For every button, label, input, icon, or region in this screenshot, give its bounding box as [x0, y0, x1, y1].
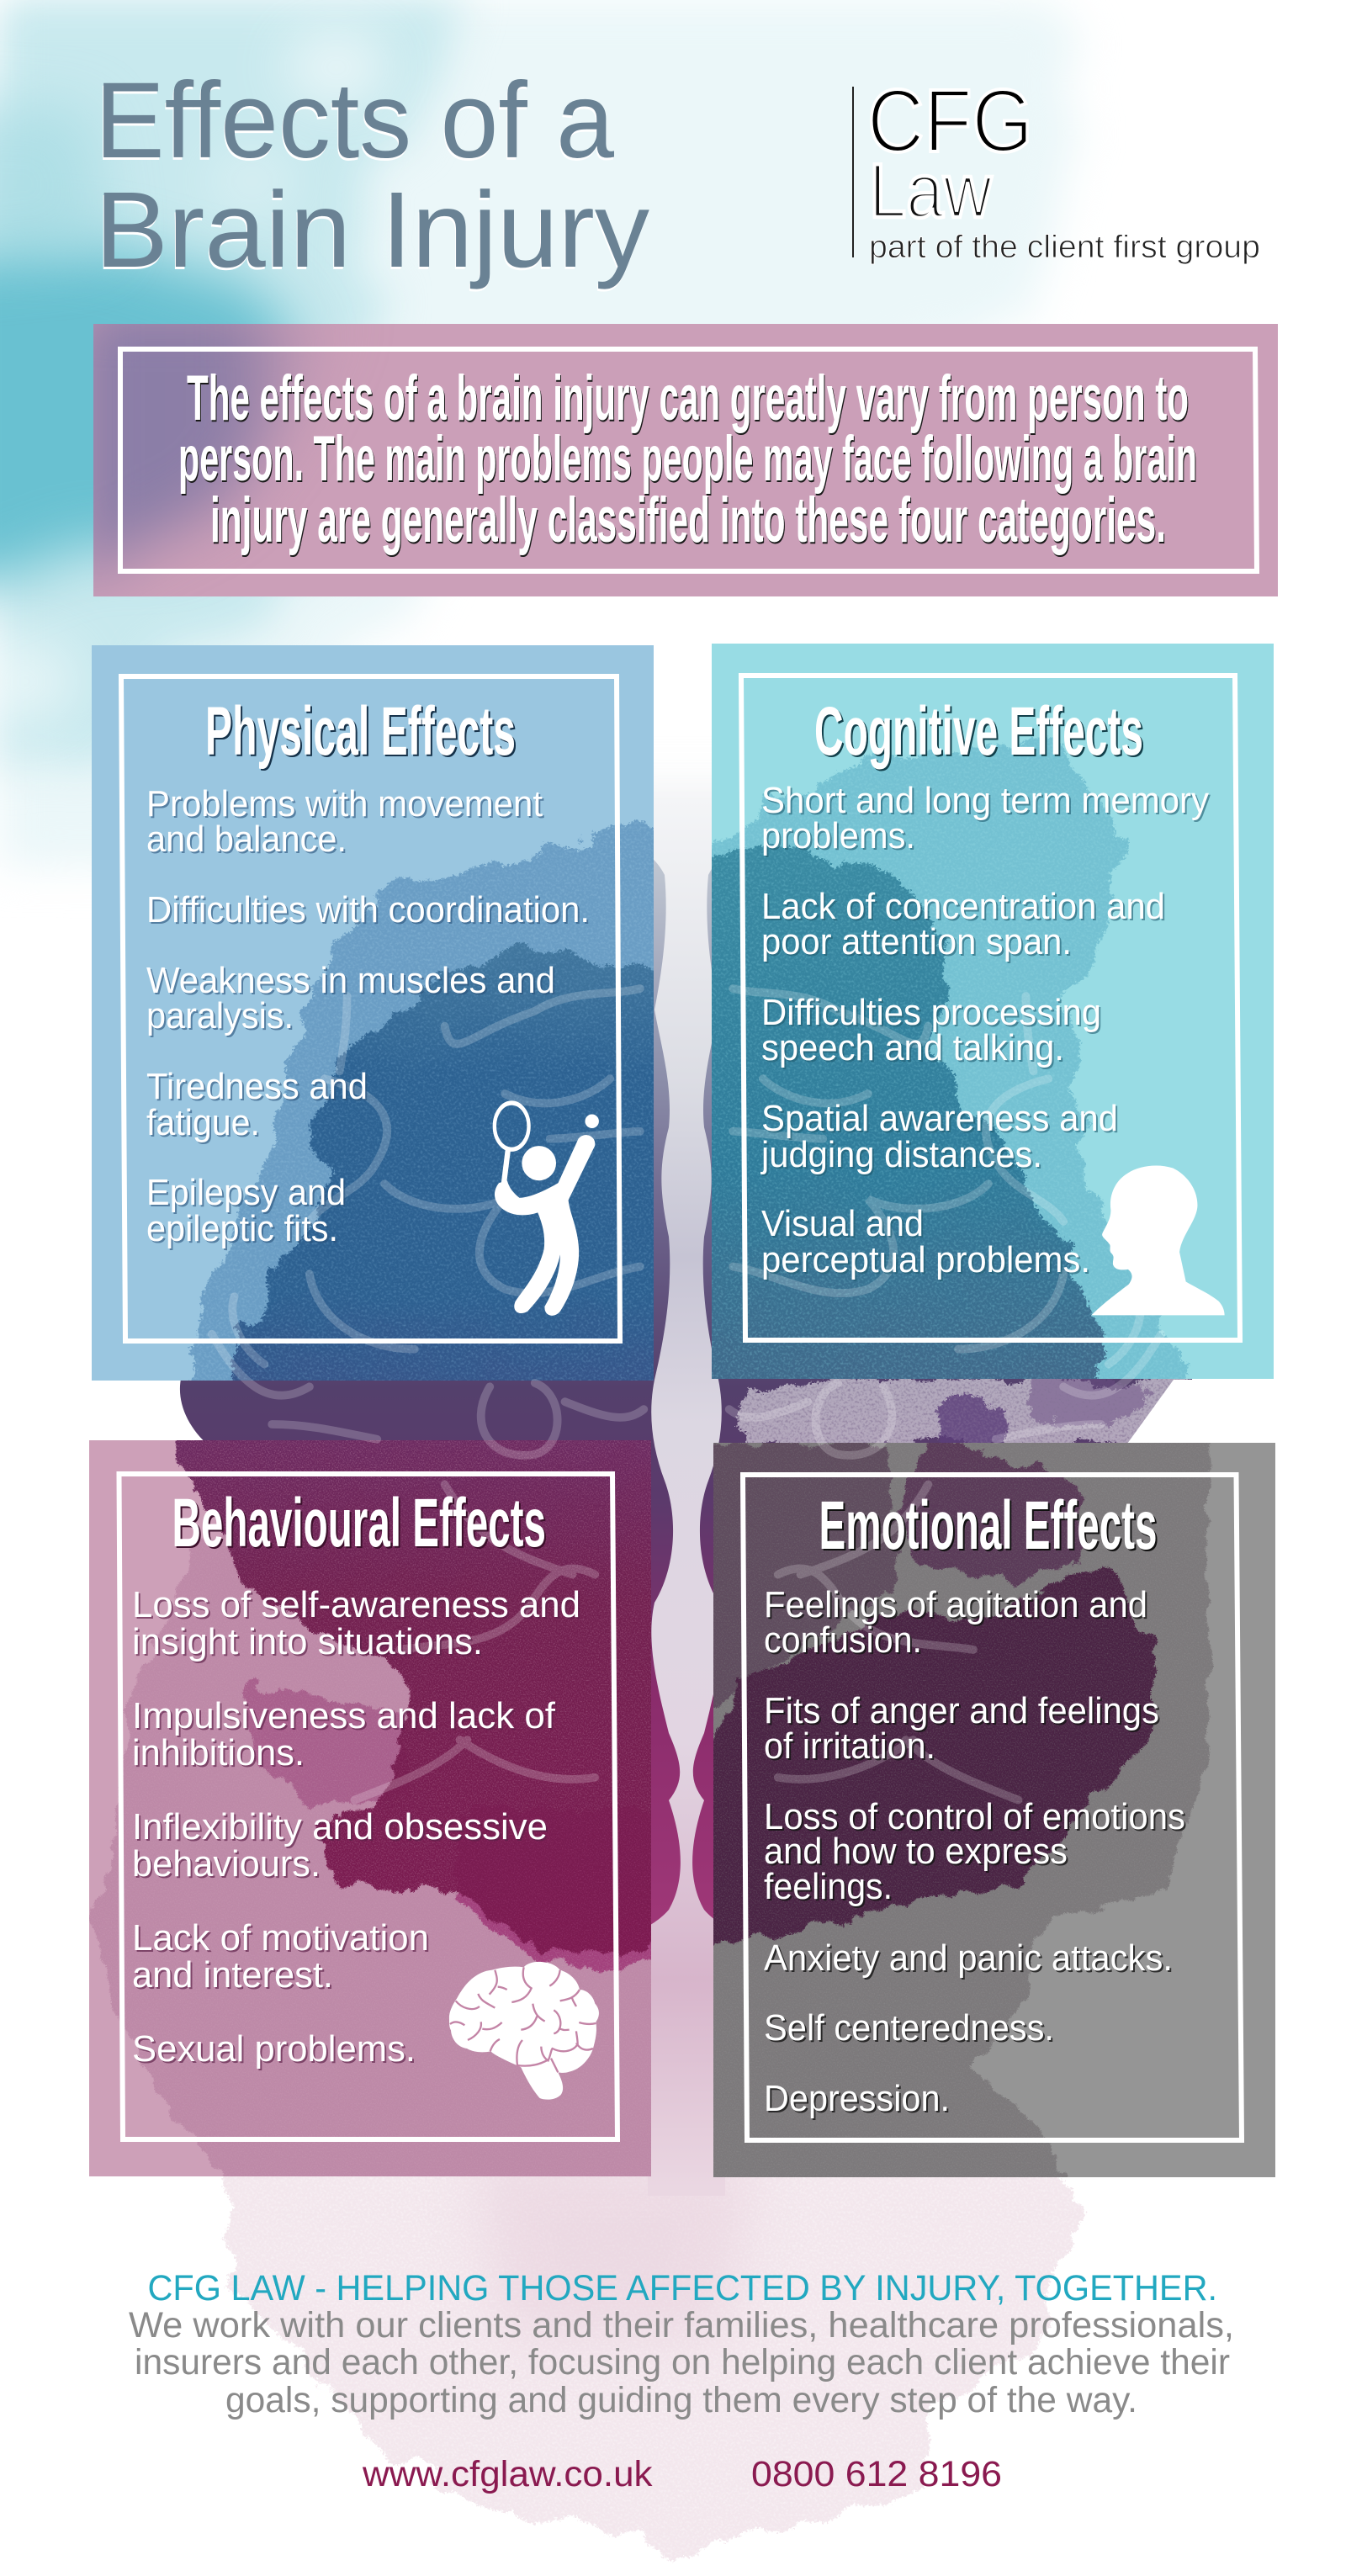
- cognitive list: perceptual problems.: [761, 1239, 1090, 1280]
- behavioural heading: Behavioural Effects: [172, 1485, 546, 1561]
- cognitive list: Short and long term memory: [761, 780, 1209, 821]
- emotional list: [764, 1584, 1185, 2119]
- physical frame: [121, 676, 620, 1341]
- physical list: [146, 783, 590, 1249]
- physical list: paralysis.: [146, 995, 294, 1036]
- emotional list: Loss of control of emotions: [764, 1796, 1185, 1837]
- logo: CFG Law: CFG: [867, 72, 1033, 171]
- emotional list: of irritation.: [764, 1725, 935, 1767]
- footer tagline: CFG LAW - HELPING THOSE AFFECTED BY INJURY, TOGETHER.: [148, 2268, 1217, 2308]
- behavioural frame: [119, 1474, 617, 2139]
- physical list: Problems with movement: [146, 783, 543, 824]
- logo: CFG Law: Law: [869, 149, 992, 234]
- behavioural list: insight into situations.: [132, 1621, 483, 1662]
- footer description: insurers and each other, focusing on helping each client achieve their: [135, 2342, 1230, 2383]
- panel: physical effects: [92, 645, 654, 1381]
- footer description: goals, supporting and guiding them every step of the way.: [225, 2380, 1137, 2420]
- emotional list: Fits of anger and feelings: [764, 1690, 1159, 1731]
- emotional list: Depression.: [764, 2078, 950, 2119]
- behavioural list: Impulsiveness and lack of: [132, 1695, 556, 1736]
- behavioural list: and interest.: [132, 1954, 333, 1996]
- brain: left and right hemispheres: [180, 841, 1346, 1940]
- contact details: www.cfglaw.co.uk: [362, 2454, 653, 2494]
- panel: intro banner: [76, 303, 1278, 596]
- physical heading: Physical Effects: [205, 693, 516, 770]
- intro text: [178, 363, 1197, 556]
- behavioural list: inhibitions.: [132, 1732, 305, 1773]
- pink watercolour wash: [227, 2154, 1081, 2549]
- cognitive list: poor attention span.: [761, 921, 1072, 962]
- emotional list: Feelings of agitation and: [764, 1584, 1147, 1625]
- cognitive list: speech and talking.: [761, 1027, 1064, 1068]
- emotional panel background: [713, 1443, 1275, 2177]
- cognitive list: Visual and: [761, 1203, 924, 1244]
- emotional list: feelings.: [764, 1866, 893, 1907]
- emotional list: and how to express: [764, 1831, 1068, 1872]
- centre column wash: [589, 799, 791, 1094]
- teal watercolour wash: [0, 0, 1094, 892]
- contact details: 0800 612 8196: [751, 2454, 1002, 2494]
- behavioural list: Inflexibility and obsessive: [132, 1806, 548, 1847]
- title: [95, 61, 649, 290]
- footer description: We work with our clients and their families, healthcare professionals,: [129, 2305, 1234, 2345]
- cognitive list: [760, 780, 1209, 1280]
- banner frame: [120, 349, 1257, 571]
- physical list: Tiredness and: [146, 1066, 368, 1107]
- cognitive list: Spatial awareness and: [761, 1098, 1118, 1139]
- physical panel background: [92, 645, 654, 1381]
- panel: behavioural effects: [89, 989, 678, 2203]
- physical list: and balance.: [146, 819, 347, 860]
- title: Brain Injury: [95, 170, 649, 290]
- physical list: epileptic fits.: [146, 1208, 338, 1249]
- cognitive list: Difficulties processing: [761, 992, 1101, 1033]
- logo: CFG Law: [852, 72, 1260, 265]
- panel: cognitive effects: [712, 644, 1274, 1379]
- emotional list: Anxiety and panic attacks.: [764, 1937, 1173, 1979]
- footer description: [129, 2305, 1234, 2420]
- cognitive list: Lack of concentration and: [761, 886, 1165, 927]
- behavioural panel background: [89, 1440, 651, 2176]
- physical list: fatigue.: [146, 1102, 260, 1143]
- cognitive frame: [741, 676, 1240, 1340]
- icon: brain: [449, 1962, 599, 2100]
- behavioural list: Loss of self-awareness and: [132, 1584, 580, 1625]
- behavioural list: [132, 1584, 580, 2070]
- icon: tennis player: [495, 1103, 599, 1316]
- behavioural list: Sexual problems.: [132, 2028, 416, 2070]
- physical list: Epilepsy and: [146, 1172, 346, 1213]
- cognitive panel background: [712, 644, 1274, 1379]
- behavioural list: behaviours.: [132, 1843, 321, 1884]
- title: Effects of a: [95, 61, 615, 181]
- cognitive list: problems.: [761, 815, 915, 856]
- contact details: [362, 2454, 1002, 2494]
- behavioural list: Lack of motivation: [132, 1917, 429, 1959]
- emotional frame: [743, 1475, 1242, 2140]
- emotional list: Self centeredness.: [764, 2007, 1054, 2049]
- cognitive list: judging distances.: [760, 1134, 1042, 1175]
- physical list: Difficulties with coordination.: [146, 889, 590, 930]
- emotional list: confusion.: [764, 1619, 922, 1661]
- physical list: Weakness in muscles and: [146, 960, 555, 1001]
- icon: human head silhouette: [1091, 1165, 1225, 1315]
- logo: CFG Law: part of the client first group: [869, 230, 1260, 265]
- panel: emotional effects: [713, 1443, 1275, 2177]
